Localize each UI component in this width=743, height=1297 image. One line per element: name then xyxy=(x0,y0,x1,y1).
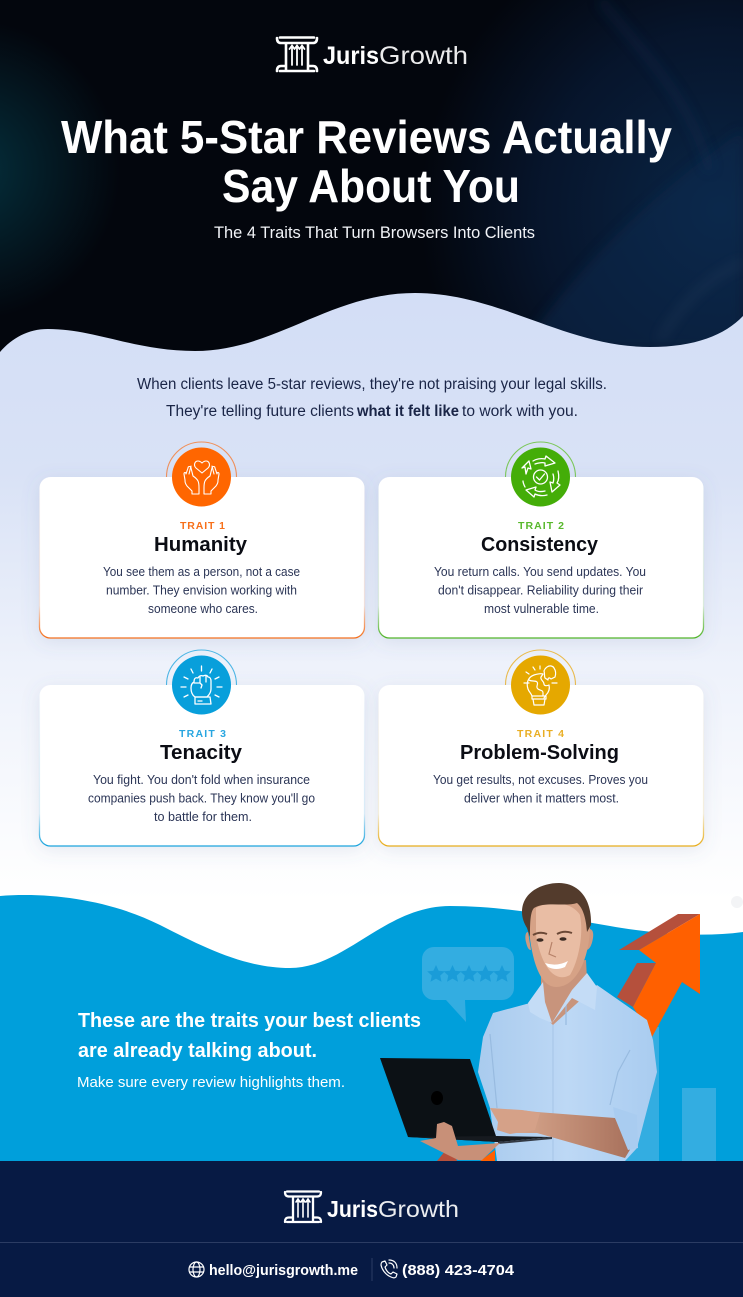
panel: trait 3 tenacity: companies push back. They know you'll go xyxy=(88,792,315,806)
icon: phone xyxy=(381,1260,397,1278)
panel: trait 1 humanity xyxy=(40,442,364,638)
head xyxy=(528,890,590,987)
logo: footer xyxy=(285,1192,459,1222)
illustration: speech bubble with stars xyxy=(422,947,514,1022)
panel: trait 2 consistency: don't disappear. Reliability during their xyxy=(438,584,643,598)
panel: trait 3 tenacity: Tenacity xyxy=(160,742,243,764)
panel: trait 1 humanity: TRAIT 1 xyxy=(180,520,225,532)
panel: trait 1 humanity: someone who cares. xyxy=(148,602,258,616)
ears xyxy=(525,929,593,950)
icon: raised fist xyxy=(172,656,231,714)
panel: trait 4 problem-solving: deliver when it matters most. xyxy=(464,792,619,806)
logo: footer: Growth xyxy=(378,1196,459,1222)
call to action text xyxy=(77,1010,421,1091)
panel: trait 2 consistency: You return calls. You send updates. You xyxy=(434,565,646,579)
panel: trait 2 consistency: TRAIT 2 xyxy=(518,520,564,532)
hero background xyxy=(0,0,743,370)
intro text: what it felt like xyxy=(356,403,459,420)
title: What 5-Star Reviews Actually xyxy=(61,111,672,163)
icon: cycle arrows with check xyxy=(511,448,570,506)
panel: trait 3 tenacity: You fight. You don't fold when insurance xyxy=(93,773,310,787)
contact: email: hello@jurisgrowth.me xyxy=(209,1262,358,1279)
panel: trait 4 problem-solving xyxy=(378,650,704,846)
panel: trait 4 problem-solving: You get results, not excuses. Proves you xyxy=(433,773,648,787)
intro text xyxy=(137,376,607,420)
panel: trait 2 consistency: most vulnerable time. xyxy=(484,602,599,616)
supporting hand xyxy=(420,1122,500,1160)
intro text: to work with you. xyxy=(462,403,578,420)
intro text: When clients leave 5-star reviews, they're not praising your legal skills. xyxy=(137,376,607,393)
blue call-to-action background with wave xyxy=(0,895,743,1162)
illustration: man with laptop xyxy=(380,883,657,1161)
logo: footer: Juris xyxy=(327,1196,378,1222)
icon: globe xyxy=(189,1262,204,1277)
shirt xyxy=(478,985,657,1161)
icon: pillar with arrows xyxy=(277,38,317,71)
panel: trait 4 problem-solving: TRAIT 4 xyxy=(517,728,564,740)
sleeve cuff xyxy=(613,1107,638,1150)
laptop xyxy=(380,1058,498,1142)
illustration: bar chart xyxy=(625,1027,716,1161)
panel: trait 1 humanity: Humanity xyxy=(154,534,248,556)
panel: trait 1 humanity: number. They envision working with xyxy=(106,584,297,598)
footer xyxy=(0,1161,743,1297)
subtitle: The 4 Traits That Turn Browsers Into Clients xyxy=(214,223,535,242)
face features xyxy=(533,932,572,935)
neck xyxy=(541,960,588,1030)
call to action text: Make sure every review highlights them. xyxy=(77,1074,345,1091)
call to action text: These are the traits your best clients xyxy=(78,1010,421,1032)
illustration: orange arrow xyxy=(437,914,700,1161)
typing hand xyxy=(490,1108,540,1134)
logo: header: Growth xyxy=(379,42,468,70)
light content background with wave xyxy=(0,293,743,905)
icon: hands holding heart xyxy=(172,448,231,506)
panel: trait 3 tenacity: to battle for them. xyxy=(154,810,252,824)
panel: trait 1 humanity: You see them as a person, not a case xyxy=(103,565,300,579)
logo: header xyxy=(277,38,468,71)
intro text: They're telling future clients xyxy=(166,403,354,420)
title xyxy=(61,111,672,212)
contact: phone: (888) 423-4704 xyxy=(402,1262,515,1279)
collar xyxy=(528,973,597,1023)
title: Say About You xyxy=(222,160,520,212)
arm xyxy=(510,1110,631,1158)
call to action text: are already talking about. xyxy=(78,1040,317,1062)
logo: header: Juris xyxy=(323,42,379,70)
panel: trait 2 consistency: Consistency xyxy=(481,534,599,556)
panel: trait 3 tenacity: TRAIT 3 xyxy=(179,728,226,740)
panel: trait 3 tenacity xyxy=(40,650,364,846)
hair xyxy=(522,883,591,937)
panel: trait 4 problem-solving: Problem-Solving xyxy=(460,742,619,764)
panel: trait 2 consistency xyxy=(378,442,704,638)
icon: puzzle light bulb xyxy=(511,656,570,714)
sleeve shadow xyxy=(490,1000,630,1108)
